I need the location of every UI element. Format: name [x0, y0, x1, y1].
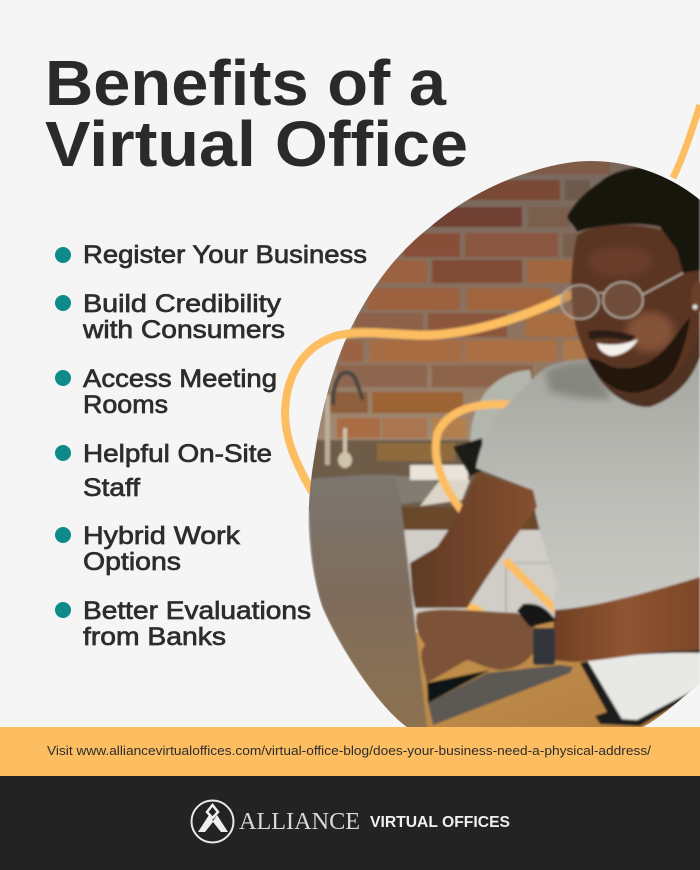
notebook [580, 650, 700, 726]
inner squiggle loop [436, 404, 556, 612]
source link band: Visit www.alliancevirtualoffices.com/virtual-office-blog/does-your-business-need-a-physical-address/ [47, 743, 651, 758]
kitchen counter, sink and cabinets [300, 372, 560, 620]
smile [597, 339, 638, 356]
title [45, 47, 468, 180]
item: helpful on-site staff: Helpful On-Site [83, 440, 272, 468]
logo wordmark: ALLIANCE [239, 809, 360, 835]
item: access meeting rooms [55, 365, 277, 419]
title: Benefits of a [45, 47, 446, 119]
logo icon [192, 800, 234, 842]
t-shirt [476, 355, 700, 612]
lamp behind the man [468, 368, 533, 444]
laptop base and keyboard [427, 665, 573, 725]
item: helpful on-site staff: Staff [83, 474, 140, 502]
item: build credibility [55, 290, 285, 344]
forehead highlight [588, 247, 652, 277]
squiggle outside photo on the left [285, 292, 576, 492]
item: better evaluations: from Banks [83, 623, 226, 651]
watch [517, 604, 556, 665]
item: better evaluations [55, 597, 311, 651]
glasses [561, 273, 683, 319]
arm near the wall [410, 472, 537, 608]
head [571, 225, 700, 395]
ear [691, 281, 700, 313]
moustache [588, 330, 636, 341]
item: helpful on-site staff [55, 440, 272, 502]
item: hybrid work options [55, 522, 241, 576]
item: register your business: Register Your Business [83, 241, 367, 269]
item: build credibility: Build Credibility [83, 290, 282, 318]
item: access meeting rooms: Access Meeting [83, 365, 277, 393]
hair [567, 167, 700, 273]
photo: man working on a laptop [285, 155, 700, 735]
item: better evaluations: Better Evaluations [83, 597, 311, 625]
title: Virtual Office [45, 108, 468, 180]
laptop lid [308, 477, 428, 735]
hand [416, 610, 535, 683]
main squiggle inside photo [285, 292, 576, 492]
shirt shadow at collar [545, 361, 612, 399]
source link band [0, 727, 700, 776]
item: build credibility: with Consumers [82, 316, 285, 344]
brick wall [317, 161, 662, 442]
table [414, 620, 696, 727]
footer bar [0, 776, 700, 870]
bullet list [55, 241, 367, 651]
cheek highlight [626, 312, 674, 352]
forearm [550, 577, 700, 662]
decorative squiggle: top right [673, 105, 700, 178]
item: access meeting rooms: Rooms [83, 391, 168, 419]
beard [587, 317, 690, 393]
earring [692, 304, 698, 310]
plant shadow [453, 438, 484, 476]
item: hybrid work options: Options [83, 548, 181, 576]
item: hybrid work options: Hybrid Work [83, 522, 241, 550]
neck [593, 330, 700, 408]
logo tagline: VIRTUAL OFFICES [370, 814, 510, 831]
